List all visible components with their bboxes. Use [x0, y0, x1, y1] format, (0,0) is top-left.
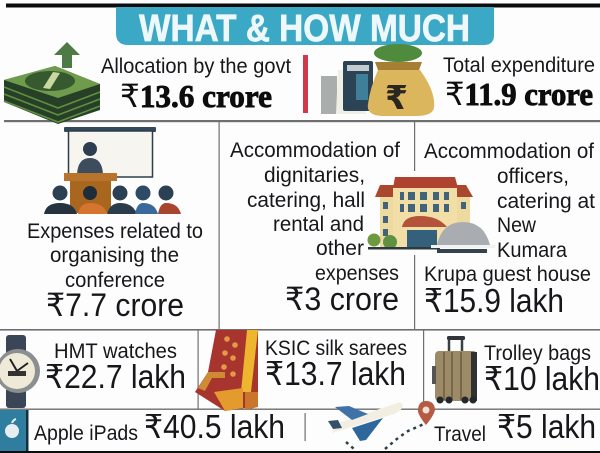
officers accommodation text: Krupa guest house: [424, 263, 591, 286]
icon: money stack with up arrow: [4, 42, 100, 124]
dignitaries accommodation text: expenses: [315, 262, 399, 285]
dignitaries accommodation text: ₹3 crore: [285, 281, 399, 317]
dignitaries accommodation text: rental and: [273, 213, 364, 236]
dignitaries accommodation text: Accommodation of: [230, 139, 400, 162]
Apple iPads text: Apple iPads: [34, 422, 138, 445]
conference expenses text: conference: [65, 269, 165, 292]
icon: silk saree: [195, 330, 258, 411]
Apple iPads text: ₹40.5 lakh: [144, 408, 285, 445]
Travel text: [434, 408, 596, 446]
KSIC silk sarees text: KSIC silk sarees: [265, 337, 407, 360]
expenditure text: Total expenditure: [443, 54, 595, 77]
conference expenses text: Expenses related to: [27, 220, 203, 243]
grid lines: [0, 120, 600, 441]
icon: hotel building with food cloche: [368, 177, 495, 253]
icon: iPad with apple logo: [0, 410, 28, 451]
conference expenses text: ₹7.7 crore: [46, 287, 184, 323]
KSIC silk sarees text: ₹13.7 lakh: [265, 355, 406, 392]
officers accommodation text: ₹15.9 lakh: [424, 282, 564, 319]
expenditure text: ₹11.9 crore: [445, 76, 593, 112]
icon: calculator, receipt and rupee bag: ₹: [385, 79, 408, 116]
title banner: WHAT & HOW MUCH: [139, 8, 470, 50]
officers accommodation text: Kumara: [497, 239, 567, 262]
icon: calculator, receipt and rupee bag: [321, 44, 434, 116]
officers accommodation text: Accommodation of: [424, 140, 594, 163]
dignitaries accommodation text: dignitaries,: [264, 164, 365, 187]
dignitaries accommodation text: catering, hall: [247, 189, 365, 212]
Travel text: Travel: [434, 423, 486, 446]
trolley bags text: [484, 342, 600, 397]
allocation text: [101, 55, 291, 114]
icon: trolley bag: [432, 336, 477, 404]
KSIC silk sarees text: [265, 337, 407, 392]
icon: airplane with dotted route and pin: [328, 401, 435, 449]
conference expenses text: organising the: [50, 244, 179, 267]
conference expenses text: [27, 220, 203, 323]
officers accommodation text: [424, 140, 595, 319]
red divider: [303, 55, 308, 113]
icon: conference speaker and audience: [44, 127, 181, 214]
officers accommodation text: catering at: [497, 190, 595, 213]
expenditure text: [443, 54, 595, 112]
officers accommodation text: New: [497, 214, 537, 237]
allocation text: ₹13.6 crore: [120, 78, 272, 114]
dignitaries accommodation text: [230, 139, 400, 317]
HMT watches text: [45, 340, 186, 395]
bottom black rule: [0, 451, 600, 453]
Apple iPads text: [34, 408, 285, 445]
dignitaries accommodation text: other: [316, 237, 364, 260]
allocation text: Allocation by the govt: [101, 55, 291, 78]
top black rule: [6, 4, 600, 8]
HMT watches text: ₹22.7 lakh: [45, 358, 186, 395]
trolley bags text: Trolley bags: [484, 342, 591, 365]
icon: wrist watch: [0, 335, 40, 408]
HMT watches text: HMT watches: [54, 340, 177, 363]
officers accommodation text: officers,: [497, 165, 569, 188]
